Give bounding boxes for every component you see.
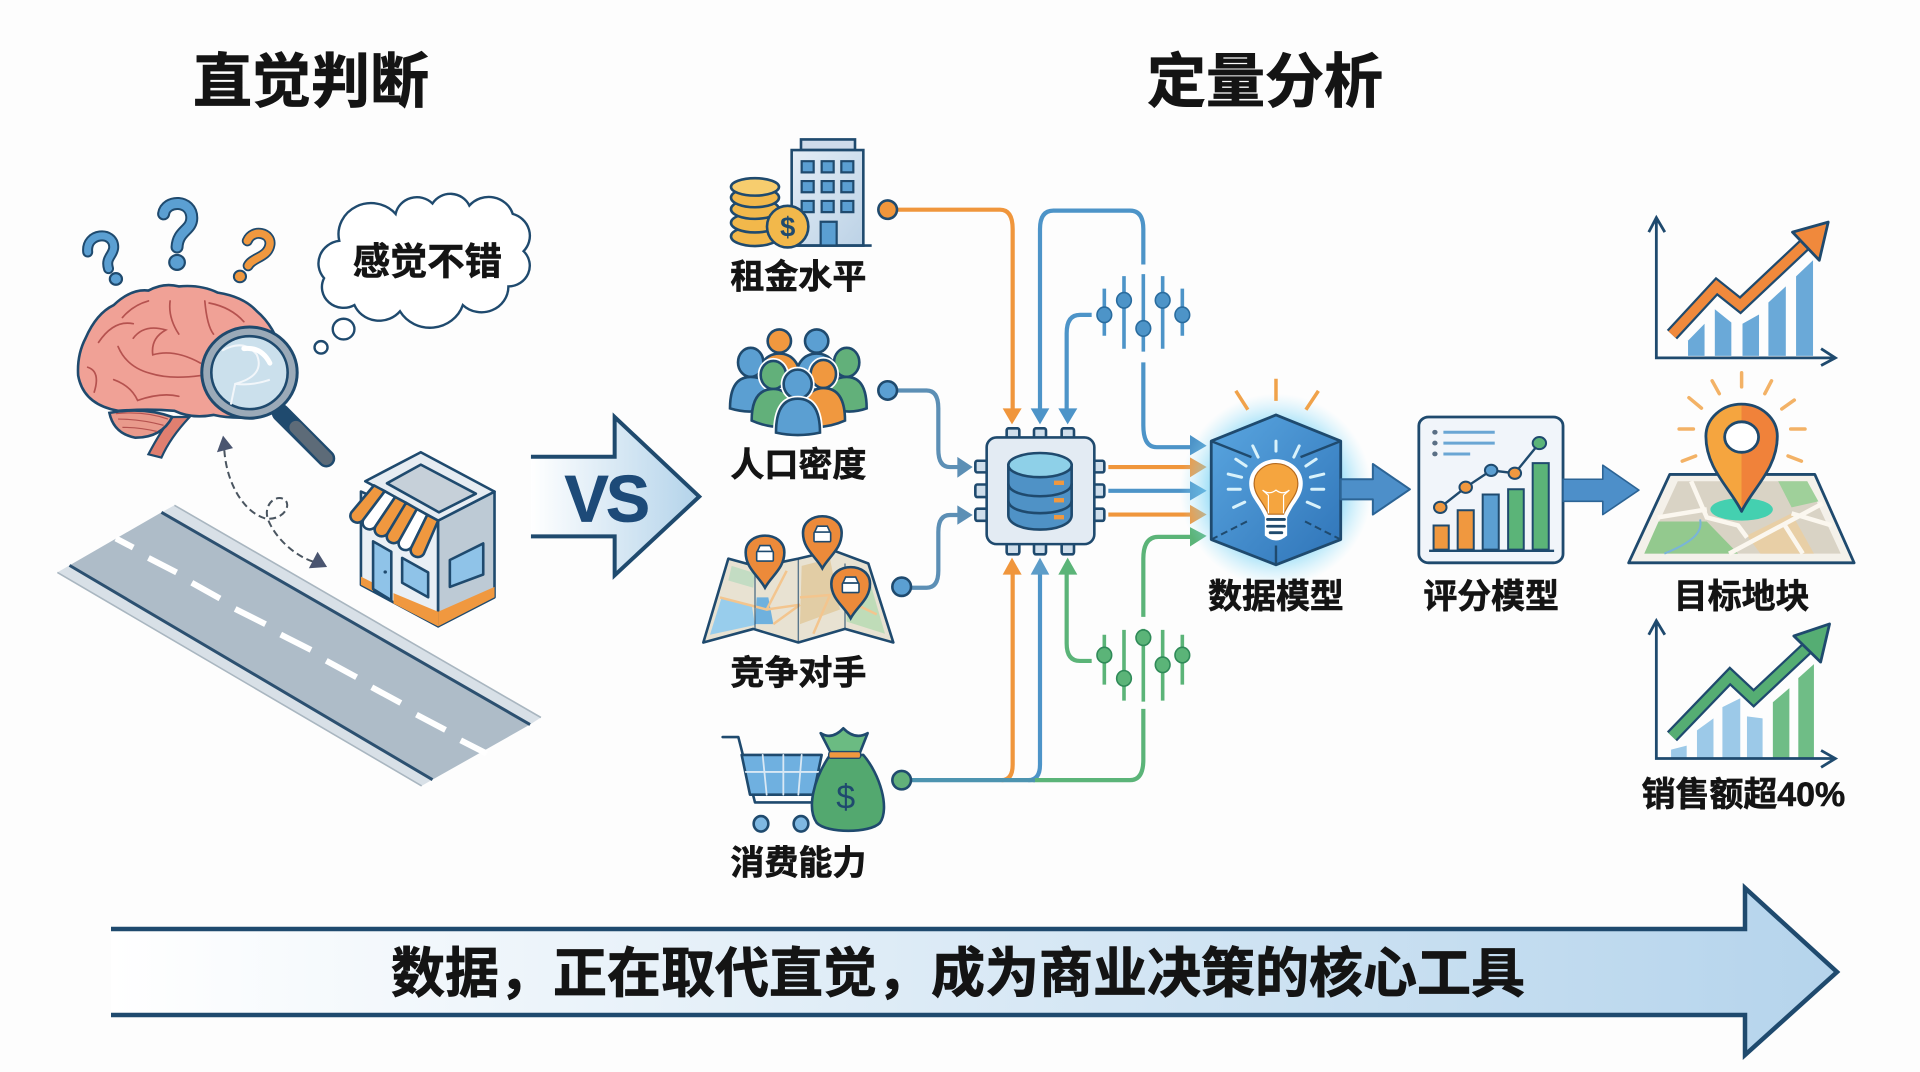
title: intuition: 直觉判断 <box>193 49 429 115</box>
label: data model: 数据模型 <box>1208 578 1344 616</box>
arrow: VS <box>531 417 699 575</box>
arrow: dashed wander path <box>217 436 327 568</box>
icon: rent building and coins <box>731 139 872 247</box>
callout: thought cloud: 感觉不错 <box>353 240 502 282</box>
icon: scoring dashboard <box>1419 417 1563 563</box>
icon: target plot map with pin <box>1629 373 1854 563</box>
icon: crowd <box>730 329 867 435</box>
arrow: VS: VS <box>565 461 648 535</box>
chart: orange rising trend <box>1649 217 1835 366</box>
chart: green rising trend <box>1649 621 1835 767</box>
arrow: score to target <box>1563 465 1639 515</box>
banner arrow: conclusion: 数据，正在取代直觉，成为商业决策的核心工具 <box>391 944 1525 1004</box>
arrowheads <box>957 408 1207 575</box>
icon: cart and money bag: $ <box>836 778 855 816</box>
icon: cart and money bag <box>723 728 884 832</box>
arrow: model to score <box>1341 464 1410 515</box>
icon: storefront <box>350 452 495 626</box>
banner arrow: conclusion <box>111 888 1837 1055</box>
callout: thought cloud <box>315 194 530 354</box>
icon: blue sliders <box>1097 274 1190 352</box>
icon: rent building and coins: $ <box>780 211 795 242</box>
connector nodes <box>878 200 911 789</box>
icon: data model cube with bulb <box>1180 379 1372 587</box>
label: population density: 人口密度 <box>730 446 866 484</box>
label: target plot: 目标地块 <box>1674 578 1809 616</box>
icon: magnifying glass <box>202 327 326 458</box>
label: sales uplift: 销售额超40% <box>1642 776 1845 814</box>
panel: data flow network <box>703 139 1207 883</box>
icon: question marks <box>88 203 270 285</box>
label: spending power: 消费能力 <box>730 845 866 883</box>
panel: intuition scene <box>57 194 699 786</box>
icon: map with competitor pins <box>703 516 893 643</box>
title: quantitative analysis: 定量分析 <box>1147 49 1383 115</box>
icon: database chip <box>975 428 1104 554</box>
icon: green sliders <box>1097 629 1190 702</box>
label: competitors: 竞争对手 <box>730 655 866 693</box>
label: rent level: 租金水平 <box>730 259 866 297</box>
road <box>57 505 541 786</box>
panel: model outcomes <box>1180 217 1854 814</box>
icon: brain <box>78 285 283 458</box>
label: scoring model: 评分模型 <box>1423 578 1559 616</box>
connectors: inputs into chip <box>897 210 1193 780</box>
